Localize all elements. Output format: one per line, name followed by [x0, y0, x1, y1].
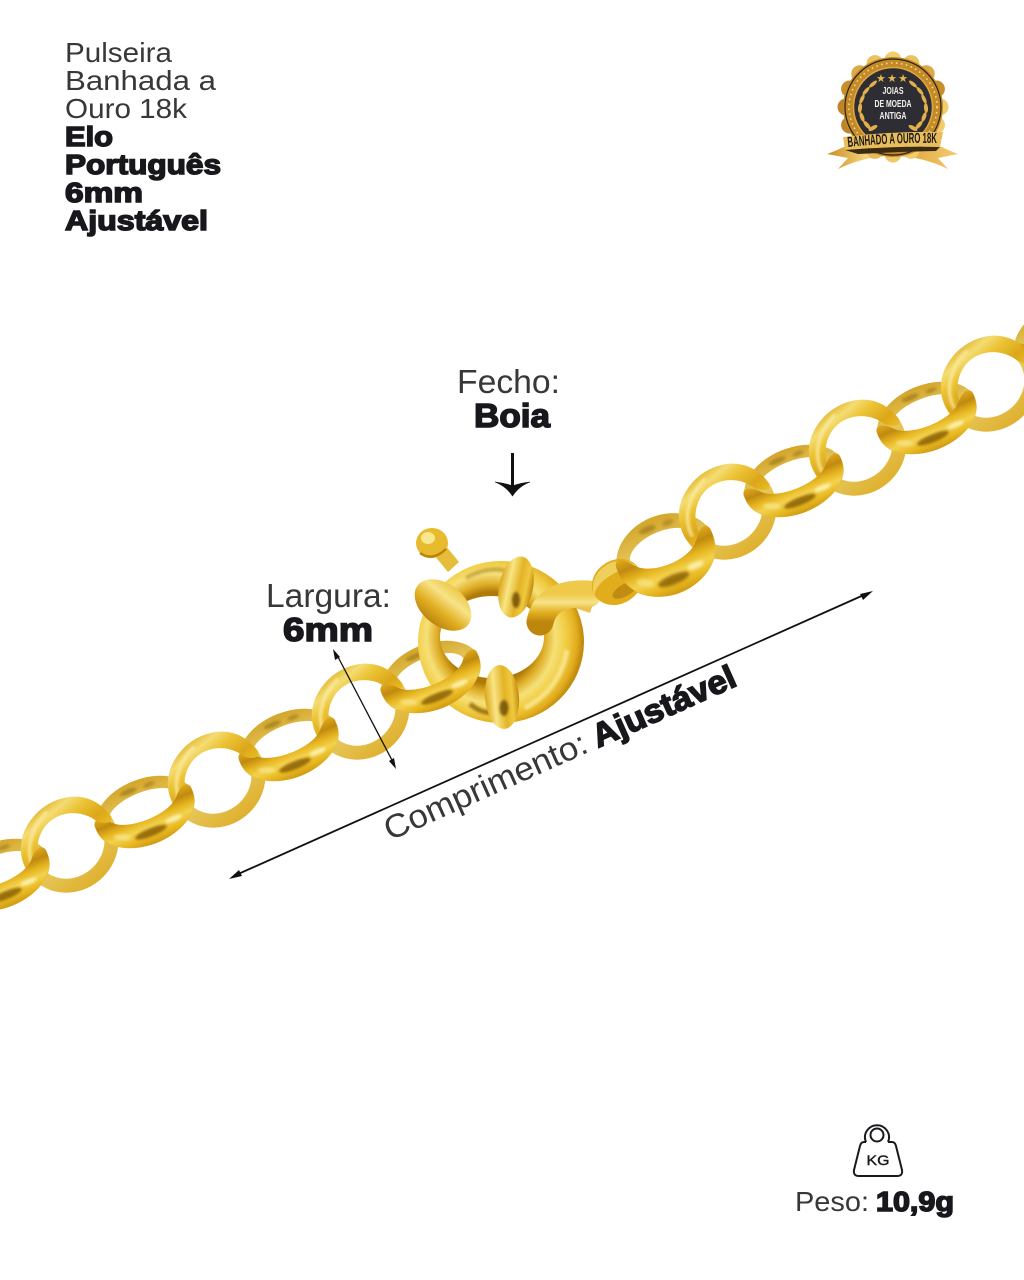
- label: comprimento ajustavel: Ajustável: [586, 658, 741, 754]
- label: fecho boia: Fecho:: [457, 363, 560, 400]
- badge: banhado a ouro 18k seal: [827, 52, 958, 169]
- badge: banhado a ouro 18k seal: BANHADO A OURO 18K: [848, 132, 937, 147]
- clasp ring: [418, 561, 584, 723]
- arrow: bracelet length: [229, 591, 873, 879]
- ribbon: [843, 132, 943, 150]
- clasp highlights: [466, 570, 510, 578]
- label: comprimento ajustavel: Comprimento:: [378, 724, 593, 847]
- title: product name: Ouro 18k: [65, 93, 188, 124]
- label: fecho boia: [457, 363, 560, 434]
- chain links: rear pale faces: [0, 286, 1024, 925]
- badge: banhado a ouro 18k seal: DE MOEDA: [874, 99, 912, 110]
- icon: kg weight: KG: [866, 1152, 890, 1168]
- title: product name: Português: [65, 149, 221, 180]
- clasp pin: [416, 528, 459, 572]
- title: product name: Banhada a: [65, 65, 216, 96]
- label: peso 10,9g: [795, 1186, 954, 1217]
- label: peso 10,9g: Peso:: [795, 1186, 869, 1217]
- chain bracelet with clasp: [0, 286, 1024, 925]
- label: comprimento ajustavel: [378, 658, 741, 847]
- label: largura 6mm: Largura:: [266, 577, 391, 614]
- title: product name: Ajustável: [65, 205, 208, 236]
- arrow: points down to clasp: [495, 453, 530, 496]
- badge: banhado a ouro 18k seal: ANTIGA: [880, 111, 906, 122]
- arrow: link width: [333, 649, 396, 769]
- title: product name: 6mm: [65, 177, 143, 208]
- label: largura 6mm: 6mm: [283, 611, 373, 648]
- title: product name: Elo: [65, 121, 113, 152]
- badge: banhado a ouro 18k seal: JOIAS: [882, 86, 904, 97]
- label: peso 10,9g: 10,9g: [876, 1186, 954, 1217]
- label: largura 6mm: [266, 577, 391, 648]
- laurel: [858, 79, 928, 132]
- clasp bands: [493, 553, 539, 621]
- spring ring clasp: [405, 528, 651, 730]
- title: product name: Pulseira: [65, 37, 172, 68]
- chain links: front polished faces: [0, 307, 1024, 925]
- icon: kg weight: [854, 1125, 902, 1176]
- stars: ★★★: [876, 72, 908, 85]
- connector link: [583, 550, 651, 614]
- title: product name: [65, 37, 221, 236]
- label: fecho boia: Boia: [474, 397, 551, 434]
